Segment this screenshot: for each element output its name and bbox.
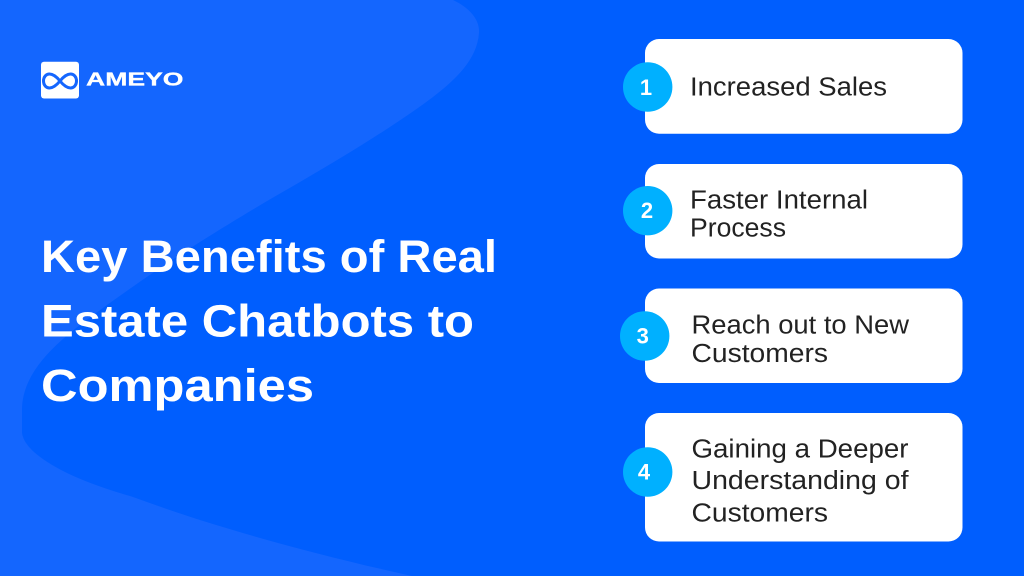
badge 3: 3 — [637, 323, 649, 348]
card 1 — [645, 39, 962, 134]
label 3: Customers — [692, 340, 828, 368]
label 2: Process — [690, 214, 786, 242]
badge 4: 4 — [638, 459, 651, 484]
title: Companies — [41, 360, 314, 411]
label 4: Gaining a Deeper — [692, 435, 909, 463]
badge 1 — [623, 62, 672, 112]
label 3 — [692, 311, 910, 368]
badge 2: 2 — [641, 198, 653, 223]
card 3 — [645, 288, 962, 383]
badge 3 — [620, 311, 669, 361]
badge 1: 1 — [640, 75, 652, 100]
badge 4 — [623, 447, 672, 497]
label 2 — [690, 186, 868, 242]
logo wordmark: AMEYO — [86, 70, 184, 90]
label 2: Faster Internal — [690, 186, 868, 214]
label 3: Reach out to New — [692, 311, 910, 339]
logo — [41, 62, 184, 98]
background lighter blob — [0, 0, 479, 576]
item 2: faster internal process — [623, 164, 962, 258]
card 2 — [645, 164, 962, 258]
label 4 — [692, 435, 910, 527]
logo icon — [41, 62, 79, 98]
badge 2 — [623, 186, 672, 235]
item 4: gaining a deeper understanding of customers — [623, 413, 962, 542]
label 1: Increased Sales — [690, 74, 887, 102]
item 1: increased sales — [623, 39, 962, 134]
label 4: Customers — [692, 499, 828, 527]
card 4 — [645, 413, 962, 542]
item 3: reach out to new customers — [620, 288, 962, 383]
title: Estate Chatbots to — [41, 296, 474, 346]
title — [41, 231, 497, 411]
label 4: Understanding of — [692, 467, 910, 495]
title: Key Benefits of Real — [41, 231, 497, 282]
